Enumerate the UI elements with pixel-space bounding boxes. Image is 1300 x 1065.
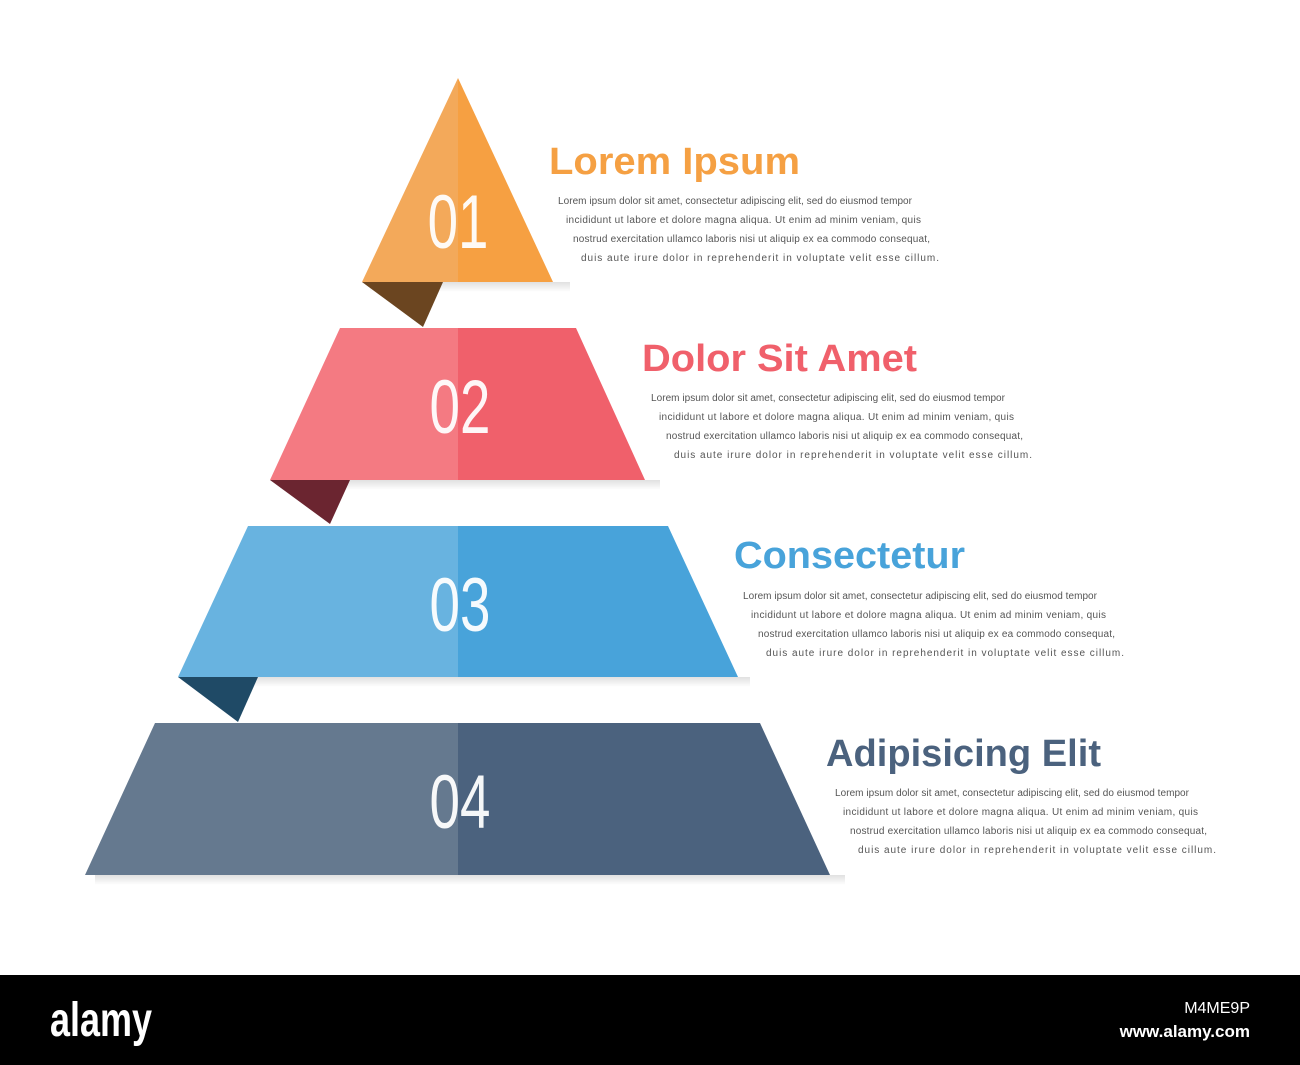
text block 3: nostrud exercitation ullamco laboris nisi ut aliquip ex ea commodo consequat, [758,629,1115,640]
text block 1: duis aute irure dolor in reprehenderit in voluptate velit esse cillum. [581,253,939,264]
text block 3 [734,535,1124,659]
text block 3: Consectetur [734,535,965,577]
text block 4: Lorem ipsum dolor sit amet, consectetur adipiscing elit, sed do eiusmod tempor [835,788,1190,799]
text block 4: incididunt ut labore et dolore magna aliqua. Ut enim ad minim veniam, quis [843,807,1198,818]
text block 2: incididunt ut labore et dolore magna aliqua. Ut enim ad minim veniam, quis [659,412,1014,423]
text block 4: Adipisicing Elit [826,733,1101,775]
text block 2: duis aute irure dolor in reprehenderit in voluptate velit esse cillum. [674,450,1032,461]
text block 1: incididunt ut labore et dolore magna aliqua. Ut enim ad minim veniam, quis [566,215,921,226]
tier 3: blue trapezoid [178,526,750,722]
text block 1 [549,141,939,264]
footer band: www.alamy.com [1119,1022,1250,1041]
text block 1: Lorem Ipsum [549,141,800,183]
text block 3: Lorem ipsum dolor sit amet, consectetur adipiscing elit, sed do eiusmod tempor [743,591,1098,602]
footer band [0,975,1300,1065]
tier 4: slate trapezoid: 04 [430,760,490,845]
text block 1: Lorem ipsum dolor sit amet, consectetur adipiscing elit, sed do eiusmod tempor [558,196,913,207]
footer band: M4ME9P [1184,1000,1250,1017]
text block 4: nostrud exercitation ullamco laboris nisi ut aliquip ex ea commodo consequat, [850,826,1207,837]
text block 4: duis aute irure dolor in reprehenderit in voluptate velit esse cillum. [858,845,1216,856]
text block 2: nostrud exercitation ullamco laboris nisi ut aliquip ex ea commodo consequat, [666,431,1023,442]
text block 1: nostrud exercitation ullamco laboris nisi ut aliquip ex ea commodo consequat, [573,234,930,245]
text block 2 [642,338,1032,461]
tier 2: red trapezoid: 02 [430,365,490,450]
text block 3: duis aute irure dolor in reprehenderit in voluptate velit esse cillum. [766,648,1124,659]
tier 4: slate trapezoid [85,723,845,885]
text block 2: Dolor Sit Amet [642,338,917,380]
tier 1: orange triangle [362,78,570,327]
text block 2: Lorem ipsum dolor sit amet, consectetur adipiscing elit, sed do eiusmod tempor [651,393,1006,404]
tier 3: blue trapezoid: 03 [430,563,490,648]
tier 2: red trapezoid [270,328,660,524]
text block 3: incididunt ut labore et dolore magna aliqua. Ut enim ad minim veniam, quis [751,610,1106,621]
footer band: alamy [50,994,152,1047]
tier 1: orange triangle: 01 [428,180,488,265]
text block 4 [826,733,1216,856]
